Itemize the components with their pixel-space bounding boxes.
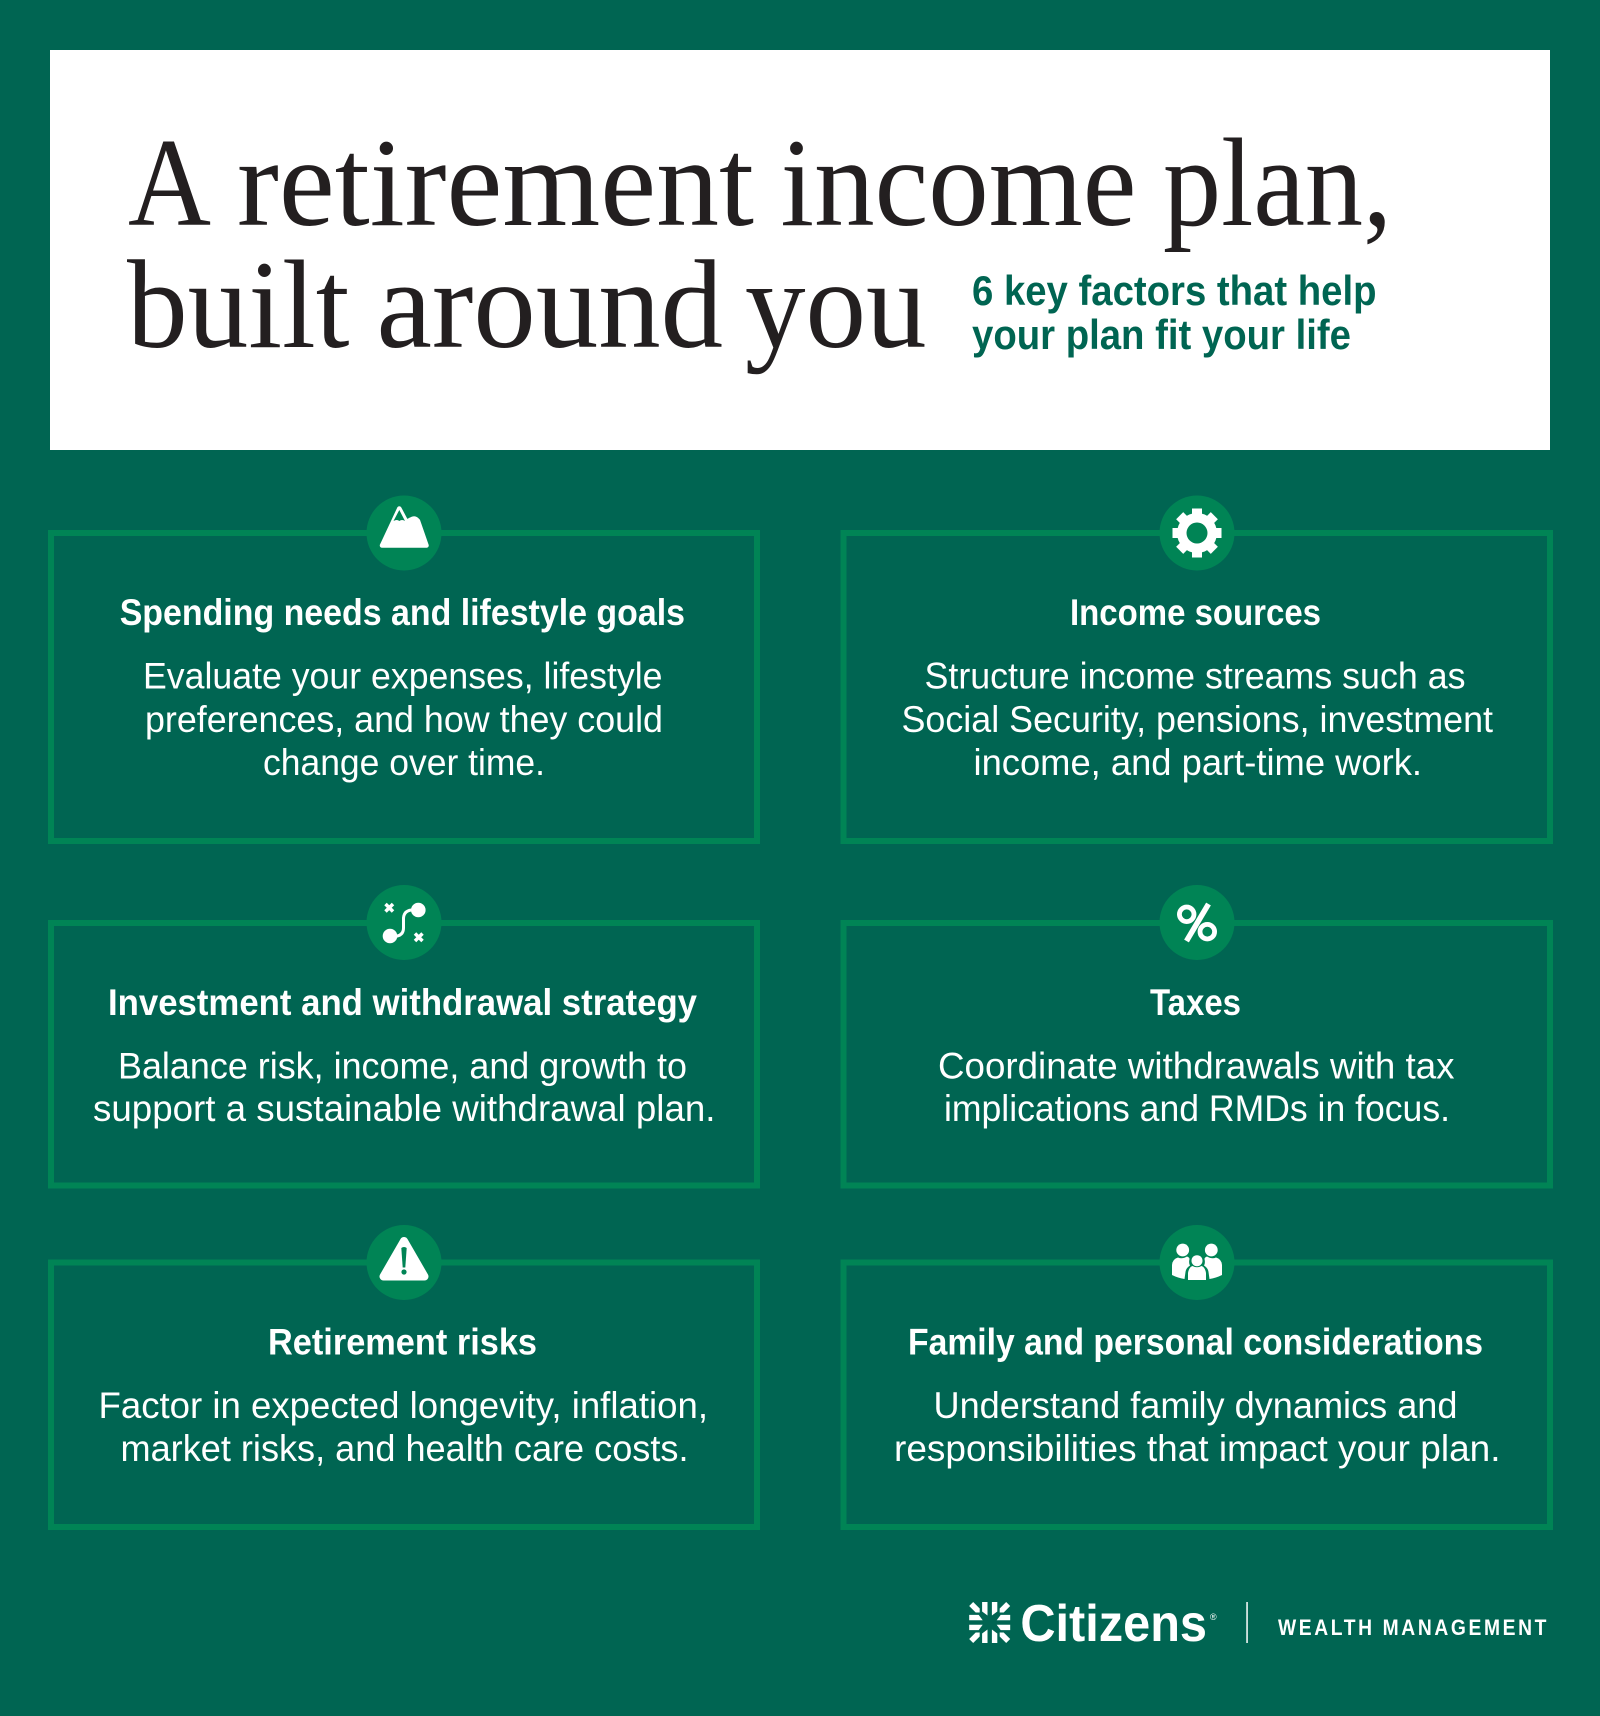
body text: responsibilities that impact your plan. bbox=[894, 1428, 1500, 1469]
title: you bbox=[745, 236, 926, 375]
registered mark: ® bbox=[1210, 1612, 1217, 1622]
icon: percent bbox=[1160, 885, 1234, 960]
body text bbox=[98, 1385, 708, 1469]
body text: Coordinate withdrawals with tax bbox=[938, 1046, 1455, 1086]
body text: Factor in expected longevity, inflation, bbox=[98, 1385, 708, 1426]
title: A bbox=[128, 114, 211, 253]
subtitle bbox=[972, 267, 1376, 358]
icon: family bbox=[1160, 1225, 1234, 1300]
title: built bbox=[127, 236, 350, 375]
subtitle: your plan fit your life bbox=[972, 311, 1351, 358]
body text bbox=[143, 656, 663, 783]
panel: taxes bbox=[844, 885, 1550, 1186]
wordmark: Citizens bbox=[1020, 1595, 1207, 1653]
title: income bbox=[780, 114, 1136, 253]
panel: retirement risks bbox=[51, 1225, 757, 1527]
icon: Citizens emblem bbox=[969, 1602, 1010, 1643]
heading: Taxes bbox=[1150, 982, 1241, 1023]
panel: spending needs and lifestyle goals bbox=[51, 496, 757, 841]
heading: Income sources bbox=[1070, 592, 1321, 633]
icon: route path bbox=[366, 885, 442, 960]
title: plan, bbox=[1163, 114, 1392, 253]
title: retirement bbox=[237, 114, 754, 253]
body text: implications and RMDs in focus. bbox=[944, 1088, 1450, 1129]
wealth management label: WEALTH MANAGEMENT bbox=[1278, 1615, 1549, 1640]
logo: Citizens Wealth Management bbox=[969, 1595, 1549, 1653]
subtitle: 6 key factors that help bbox=[972, 267, 1376, 314]
body text: Social Security, pensions, investment bbox=[902, 699, 1494, 740]
body text bbox=[902, 656, 1494, 783]
body text bbox=[894, 1385, 1500, 1469]
heading: Family and personal considerations bbox=[908, 1322, 1483, 1362]
heading: Retirement risks bbox=[268, 1322, 537, 1362]
heading: Spending needs and lifestyle goals bbox=[120, 592, 685, 633]
icon: mountain bbox=[366, 496, 442, 570]
icon: warning triangle bbox=[366, 1225, 442, 1300]
panel: investment and withdrawal strategy bbox=[51, 885, 757, 1186]
title bbox=[127, 114, 1392, 375]
panel: family and personal considerations bbox=[844, 1225, 1550, 1527]
body text: change over time. bbox=[263, 742, 545, 783]
body text: market risks, and health care costs. bbox=[120, 1428, 688, 1469]
body text: income, and part-time work. bbox=[974, 742, 1422, 783]
panel: title banner bbox=[50, 50, 1550, 450]
title: around bbox=[376, 236, 723, 375]
icon: gear bbox=[1160, 496, 1234, 570]
divider bbox=[1246, 1602, 1248, 1643]
body text: Balance risk, income, and growth to bbox=[118, 1046, 687, 1086]
body text bbox=[93, 1046, 716, 1129]
panel: income sources bbox=[844, 496, 1550, 841]
body text: preferences, and how they could bbox=[145, 699, 663, 740]
body text: Understand family dynamics and bbox=[934, 1385, 1458, 1426]
body text: Structure income streams such as bbox=[924, 656, 1466, 696]
heading: Investment and withdrawal strategy bbox=[108, 982, 697, 1023]
body text bbox=[938, 1046, 1455, 1129]
body text: Evaluate your expenses, lifestyle bbox=[143, 656, 662, 696]
body text: support a sustainable withdrawal plan. bbox=[93, 1088, 716, 1129]
